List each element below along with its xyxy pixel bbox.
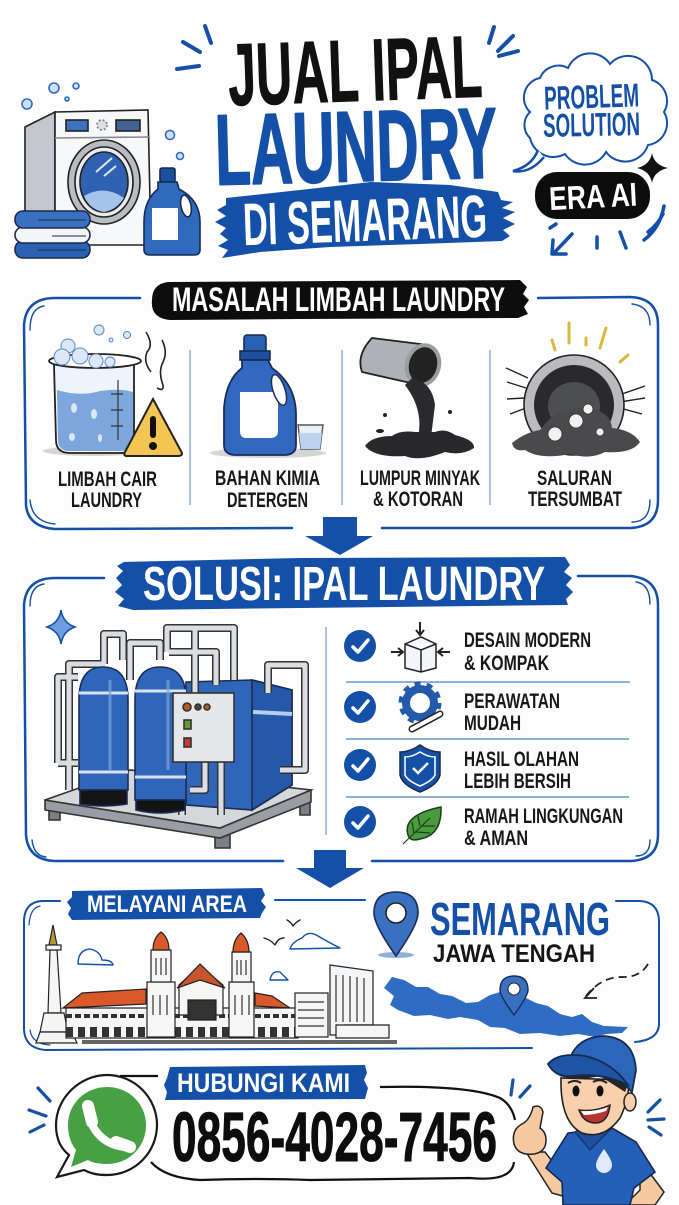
icon: gear and wrench [401,684,440,729]
control panel [173,693,234,762]
brush banner: di Semarang: DI SEMARANG [242,183,488,258]
arrow: dashed pointer [585,964,648,998]
tank box [186,680,292,810]
panel: contact [29,1036,664,1205]
header: title block [177,17,518,258]
icon: leaf [403,807,441,844]
check marks [344,630,376,838]
icon: large location pin [374,892,418,958]
icon: shield [400,745,440,792]
labels: problem items: LIMBAH CAIR [58,468,157,491]
labels: problem items: LAUNDRY [71,489,142,512]
callout: problem solution era AI [513,53,668,254]
panel border [24,297,658,529]
arrow: problem to solution [305,517,373,555]
brush banner: di Semarang [215,182,515,258]
arm right [625,1160,664,1205]
badge: hubungi kami: HUBUNGI KAMI [177,1068,350,1098]
pipes [58,628,305,815]
icon: map pin [500,976,528,1015]
labels: problem items: DETERGEN [227,489,308,512]
text: benefits: HASIL OLAHAN [464,748,579,771]
panel: melayani area [24,888,659,1050]
benefits list [344,622,623,850]
speech cloud [513,53,667,171]
title: Jual IPAL: JUAL IPAL [226,17,484,124]
labels: problem items: BAHAN KIMIA [215,467,320,490]
icon: beaker of waste water with warning [43,325,182,456]
labels: problem items: SALURAN [537,467,612,490]
heading: masalah limbah laundry: MASALAH LIMBAH LAUNDRY [172,281,505,319]
accent: arrow and strokes [550,206,664,254]
hand thumbs up [513,1106,546,1154]
badge: era AI: ERA AI [548,176,638,217]
text: benefits: MUDAH [464,712,521,735]
body [546,1128,655,1205]
icon: whatsapp [56,1075,157,1177]
badge: melayani area: MELAYANI AREA [87,891,247,918]
panel: solusi ipal laundry [24,557,658,861]
labels: problem items: LUMPUR MINYAK [360,467,480,490]
text: benefits [464,629,623,850]
illustration: technician mascot [513,1036,664,1205]
vertical divider [325,627,327,835]
illustration: ipal machine [45,628,311,848]
clouds and birds [78,920,340,980]
column dividers [190,350,490,505]
text: jawa tengah: JAWA TENGAH [433,940,595,968]
icon: pipe pouring sludge [360,338,474,458]
ground [82,1040,397,1044]
icon: folded towels [15,211,90,258]
blue filter tanks [79,667,186,813]
text: benefits: & AMAN [464,827,528,850]
roofs and main building [63,932,298,1038]
text: benefits: PERAWATAN [464,690,560,713]
arrow: solution to area [296,850,364,888]
labels: problem items: & KOTORAN [373,488,463,511]
icon: clogged drain [506,323,645,457]
labels: problem items: TERSUMBAT [528,488,622,511]
accent strokes [29,1080,664,1135]
panel border [24,576,658,861]
icon: washing machine [25,110,151,245]
heading: masalah limbah laundry [152,280,529,320]
icon: detergent bottle [144,168,200,255]
head [559,1074,636,1135]
text: benefits: & KOMPAK [464,652,549,675]
icon: sparkle [47,610,75,644]
labels: problem items [58,467,622,512]
outline: phone pill [120,1076,515,1180]
text: benefits: LEBIH BERSIH [464,770,571,793]
illustration: washing machine and laundry [15,83,200,258]
icon: sparkle [637,153,668,183]
accent strokes around title [177,26,518,69]
arm left [526,1152,566,1197]
office towers [295,965,389,1038]
illustration: semarang skyline [36,920,397,1043]
map: java island [384,977,628,1037]
icon: compact cube [391,622,450,672]
text: benefits: DESAIN MODERN [464,629,591,652]
icon: bubbles [22,83,184,160]
panel: masalah limbah laundry [24,280,658,529]
row separators [346,682,630,797]
icon: detergent jug [210,335,326,458]
monument [36,925,77,1043]
cap [548,1036,636,1092]
collar and logo [575,1122,612,1150]
panel border [24,900,659,1050]
platform [45,770,311,848]
text: phone number: 0856-4028-7456 [172,1098,497,1176]
